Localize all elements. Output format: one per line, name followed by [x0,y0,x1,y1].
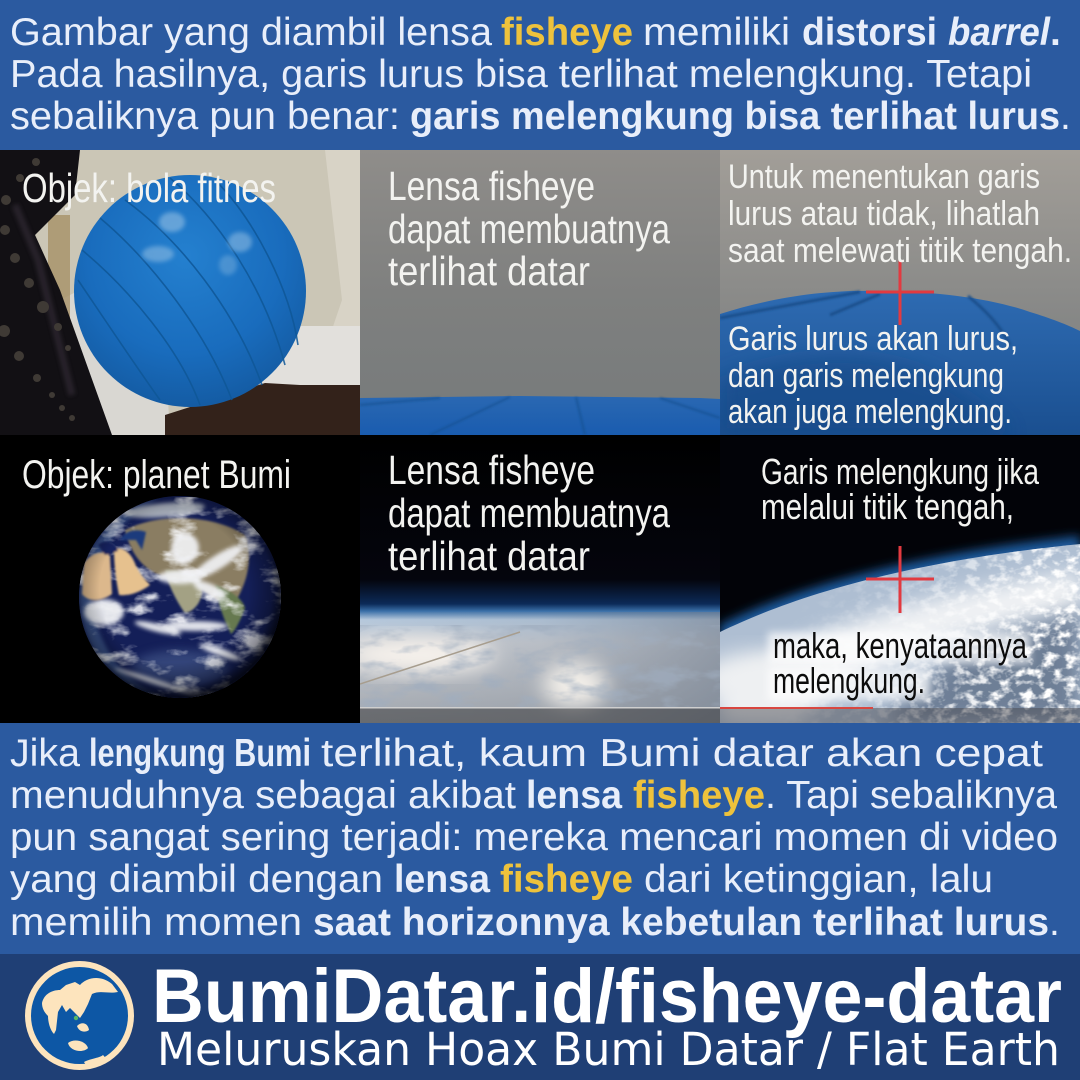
label: object earth: Objek: planet Bumi [22,453,291,497]
intro text block [10,11,1071,138]
text: lens can make it flat: terlihat datar [388,248,590,294]
text: lens can make it flat: Lensa fisheye [388,163,595,209]
conclusion text block: . Tapi sebaliknya [765,774,1057,817]
text: lens can make it flat [388,163,670,294]
conclusion text block: pun sangat sering terjadi: mereka mencari momen di video [10,816,1058,859]
progress line red [720,707,873,709]
intro text block: Gambar yang diambil lensa [10,11,492,54]
conclusion text block: lensa [526,774,622,817]
intro text block: fisheye [501,11,633,54]
conclusion text block: terlihat, kaum Bumi datar akan cepat [321,732,1043,775]
text: curved if through the center: melalui titik tengah, [761,486,1014,527]
conclusion text block: yang diambil dengan [10,858,383,901]
land blended [125,518,249,634]
crosshair top [866,260,934,325]
edge haze [79,497,160,697]
Red Sea Africa Arabia over clouds [82,530,150,600]
conclusion text block: menuduhnya sebagai akibat [10,774,516,817]
panel: flat looking ball [360,150,720,435]
conclusion text block: saat horizonnya kebetulan terlihat lurus [313,901,1049,944]
SE Asia [215,585,245,634]
conclusion text block: . [1049,901,1060,944]
conclusion text block: fisheye [500,858,633,901]
text: how to determine straight lines [728,158,1072,431]
intro text block: . [1060,95,1071,138]
tagline: Meluruskan Hoax Bumi Datar / Flat Earth [157,1023,1060,1076]
image grid backing [0,150,1080,723]
conclusion text block: Jika [10,732,80,775]
conclusion text block: memilih momen [10,901,302,944]
chair [0,150,112,435]
icon: globe logo [25,961,134,1070]
panel: curved horizon with cross [720,526,1080,723]
text: lens can make it flat (earth): dapat membuatnya [388,490,670,536]
intro text block: sebaliknya pun benar: [10,95,400,138]
panel: planet earth photo [79,496,281,698]
cloud texture [79,497,281,698]
footer band [0,954,1080,1080]
intro text block: Pada hasilnya, garis lurus bisa terlihat melengkung. Tetapi [10,53,1032,96]
text: how to determine straight lines: dan garis melengkung [728,357,1004,395]
southern ocean [132,650,228,686]
crosshair bottom [866,546,934,613]
text: how to determine straight lines: lurus atau tidak, lihatlah [728,195,1040,233]
intro text block: barrel [948,11,1051,54]
text: actually curved [768,625,1030,701]
panel: fitness ball photo [0,150,360,435]
panel: curved ball with cross [720,150,1080,435]
India [165,570,202,613]
text: actually curved: melengkung. [773,660,925,701]
text: how to determine straight lines: Garis lurus akan lurus, [728,320,1018,358]
text: lens can make it flat: dapat membuatnya [388,206,670,252]
intro text block: garis melengkung bisa terlihat lurus [410,95,1060,138]
text: how to determine straight lines: akan juga melengkung. [728,393,1012,431]
text: lens can make it flat (earth) [388,447,670,579]
conclusion text block: dari ketinggian, lalu [644,858,993,901]
intro text block: . [1050,11,1061,54]
intro text block: memiliki [643,11,790,54]
text: lens can make it flat (earth): Lensa fisheye [388,447,595,493]
carpet [165,383,360,435]
text: lens can make it flat (earth): terlihat datar [388,533,590,579]
conclusion text block: lengkung Bumi [89,732,311,775]
ball [74,175,306,407]
conclusion text block: lensa [394,858,490,901]
panel: flat looking horizon [360,525,720,723]
label: object ball: Objek: bola fitnes [22,165,276,211]
conclusion text block [10,732,1060,944]
intro text block: distorsi [802,11,937,54]
Asia brown [125,518,249,610]
conclusion text block: fisheye [633,774,765,817]
text: curved if through the center [761,451,1040,527]
